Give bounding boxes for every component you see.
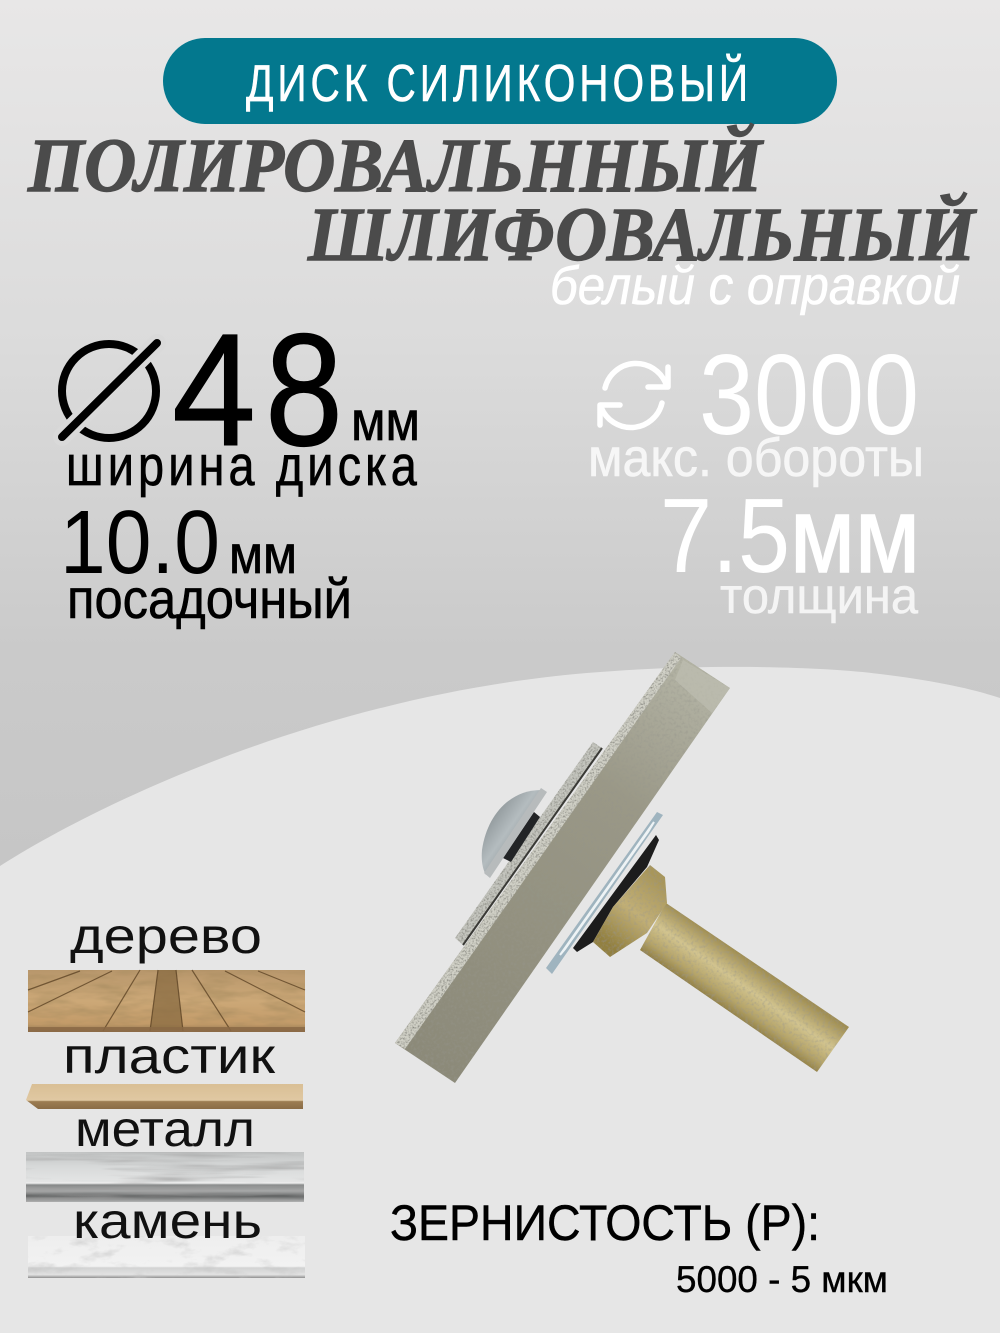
subtitle: белый с оправкой (550, 256, 960, 316)
title: grinding: ШЛИФОВАЛЬНЫЙ (307, 192, 978, 277)
diameter label: ширина диска (66, 434, 421, 498)
grit range: 5000 - 5 мкм (676, 1259, 888, 1300)
header pill: ДИСК СИЛИКОНОВЫЙ (246, 54, 752, 113)
flange plate (455, 742, 602, 945)
material swatch: stone (28, 1236, 305, 1278)
rpm spec (588, 332, 924, 488)
disc top face (675, 660, 730, 713)
grit heading: ЗЕРНИСТОСТЬ (Р): (390, 1195, 820, 1251)
material label: stone: камень (73, 1193, 262, 1249)
bolt dome (482, 790, 541, 875)
diameter unit: мм (351, 389, 420, 452)
rpm label: макс. обороты (588, 428, 924, 488)
disc body (395, 652, 730, 1083)
rpm value: 3000 (699, 332, 919, 459)
thickness value: 7.5 (660, 477, 790, 595)
bore unit: мм (229, 525, 297, 585)
material swatch: plastic (26, 1084, 303, 1109)
thickness value: мм (790, 474, 920, 595)
material label: metal: металл (75, 1101, 255, 1157)
material label: wood: дерево (70, 908, 262, 964)
icon: rotation arrows (600, 363, 668, 428)
diameter value (172, 300, 343, 479)
bolt washer (484, 788, 547, 878)
diameter value: 8 (265, 300, 343, 479)
brass collar (593, 865, 667, 957)
diameter value: 4 (172, 300, 256, 479)
bolt dark gap (503, 812, 540, 862)
thickness value (660, 474, 920, 595)
light curved lower panel (0, 667, 1000, 1333)
rear washer (546, 812, 663, 974)
materials list (26, 908, 305, 1278)
thickness spec (660, 474, 920, 624)
thickness label: толщина (720, 568, 918, 624)
material label: plastic: пластик (63, 1028, 276, 1084)
disc speckled edge (395, 652, 681, 1049)
black rubber ring (573, 835, 659, 952)
bore spec (60, 493, 352, 630)
bore label: посадочный (67, 567, 352, 630)
product: silicone disc on shank (395, 652, 849, 1083)
shank (640, 903, 849, 1072)
diameter spec (62, 300, 421, 498)
header pill (163, 38, 837, 124)
title: polishing: ПОЛИРОВАЛЬННЫЙ (27, 123, 765, 208)
bore value: 10.0 (60, 493, 220, 593)
material swatch: wood (28, 970, 305, 1032)
icon: diameter symbol (62, 343, 157, 438)
material swatch: metal (26, 1152, 304, 1202)
